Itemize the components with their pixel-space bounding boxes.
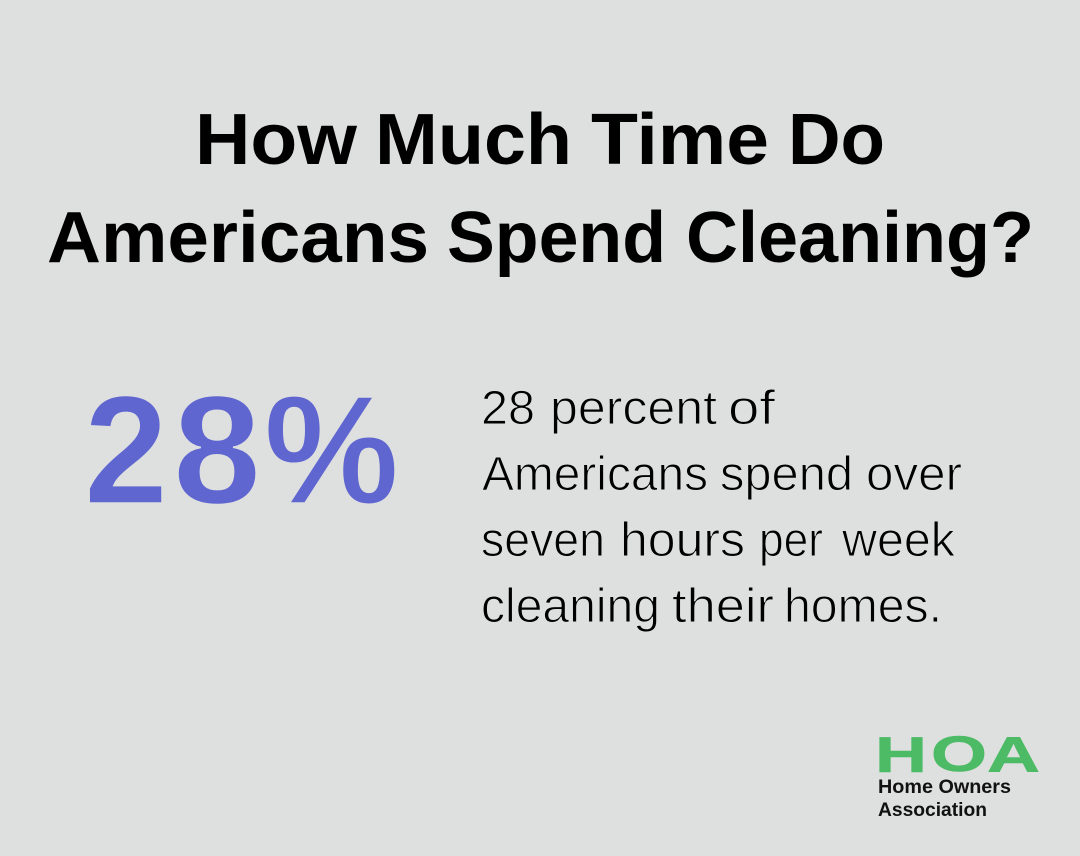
logo name: Association — [878, 800, 987, 821]
title: Do — [788, 100, 885, 180]
title: Time — [591, 100, 769, 180]
description text: seven — [481, 514, 605, 567]
title: Americans — [47, 198, 429, 278]
big statistic: 28%: 8 — [173, 364, 261, 536]
logo mark: HOA: H — [875, 727, 927, 783]
logo mark: HOA: A — [987, 727, 1040, 783]
description text: of — [728, 382, 776, 435]
logo name — [878, 777, 1011, 821]
big statistic: 28%: 2 — [84, 364, 168, 536]
description text: homes. — [784, 580, 942, 633]
description text: per — [759, 514, 823, 567]
description text: spend — [720, 448, 853, 501]
description text: hours — [620, 514, 745, 567]
title — [47, 100, 1034, 278]
title: Cleaning? — [686, 198, 1034, 278]
description text: 28 — [481, 382, 535, 435]
description text: Americans — [482, 448, 708, 501]
logo mark: HOA: O — [931, 726, 987, 782]
description text: their — [672, 580, 774, 633]
description text: over — [866, 448, 962, 501]
title: Spend — [447, 198, 666, 278]
description text: cleaning — [481, 580, 660, 633]
title: How — [195, 100, 358, 180]
description text — [481, 382, 962, 633]
description text: percent — [550, 382, 717, 435]
description text: week — [841, 514, 956, 567]
big statistic: 28% — [84, 364, 399, 536]
logo mark: HOA — [875, 726, 1040, 783]
title: Much — [375, 100, 572, 180]
logo name: Home Owners — [878, 777, 1011, 798]
big statistic: 28%: % — [264, 364, 399, 536]
logo: Home Owners Association — [875, 726, 1040, 821]
